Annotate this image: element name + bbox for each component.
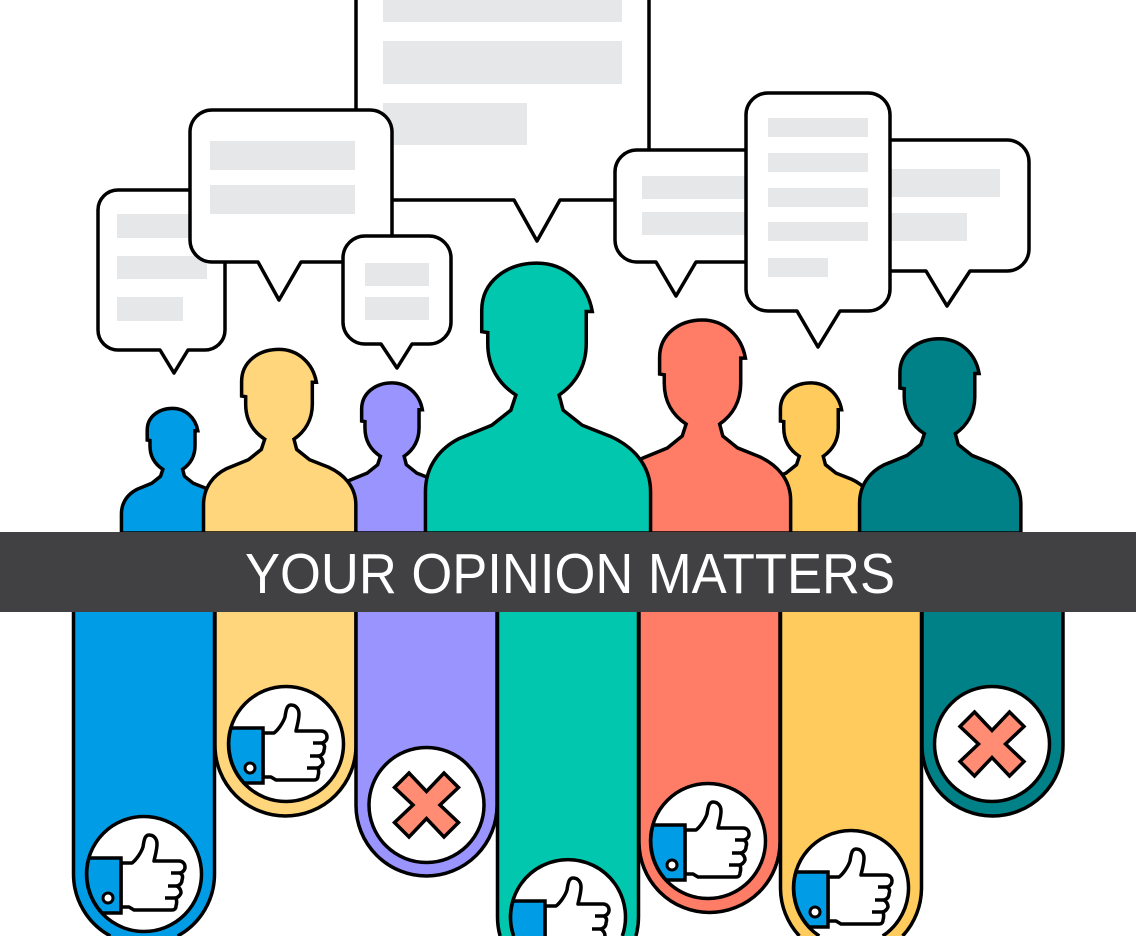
icon: cross on purple column bbox=[369, 748, 484, 862]
speech bubble: far left bbox=[98, 190, 225, 373]
title banner bbox=[0, 532, 1136, 612]
title: YOUR OPINION MATTERS bbox=[245, 542, 895, 606]
speech bubble: small left of centre bbox=[343, 236, 451, 368]
speech bubble: right of centre bbox=[615, 150, 790, 296]
column: blue bbox=[73, 600, 214, 936]
speech bubble: upper left bbox=[190, 110, 392, 300]
person silhouette: purple bbox=[331, 383, 454, 533]
column: teal bbox=[498, 600, 639, 936]
icon: thumbs up on coral column bbox=[650, 784, 766, 898]
icon: thumbs up on light yellow column bbox=[228, 686, 344, 802]
column: dark teal bbox=[922, 600, 1063, 816]
icon: thumbs up on yellow column bbox=[794, 831, 908, 936]
column: purple bbox=[356, 600, 497, 876]
person silhouette: light yellow bbox=[204, 349, 356, 533]
column: light yellow bbox=[215, 600, 356, 816]
column: coral bbox=[639, 600, 780, 912]
speech bubble: far right bbox=[860, 140, 1029, 306]
icon: cross on dark teal column bbox=[934, 686, 1050, 802]
speech bubble: tall right bbox=[746, 93, 890, 347]
person silhouette: coral bbox=[616, 320, 791, 533]
column: yellow bbox=[780, 600, 922, 936]
person silhouette: dark teal bbox=[860, 339, 1021, 533]
icon: thumbs up on teal column bbox=[510, 860, 626, 936]
person silhouette: yellow bbox=[749, 383, 874, 533]
icon: thumbs up on blue column bbox=[86, 816, 202, 932]
person silhouette: blue bbox=[121, 408, 224, 533]
person silhouette: teal bbox=[425, 263, 651, 533]
speech bubble: large centre bbox=[356, 0, 649, 241]
